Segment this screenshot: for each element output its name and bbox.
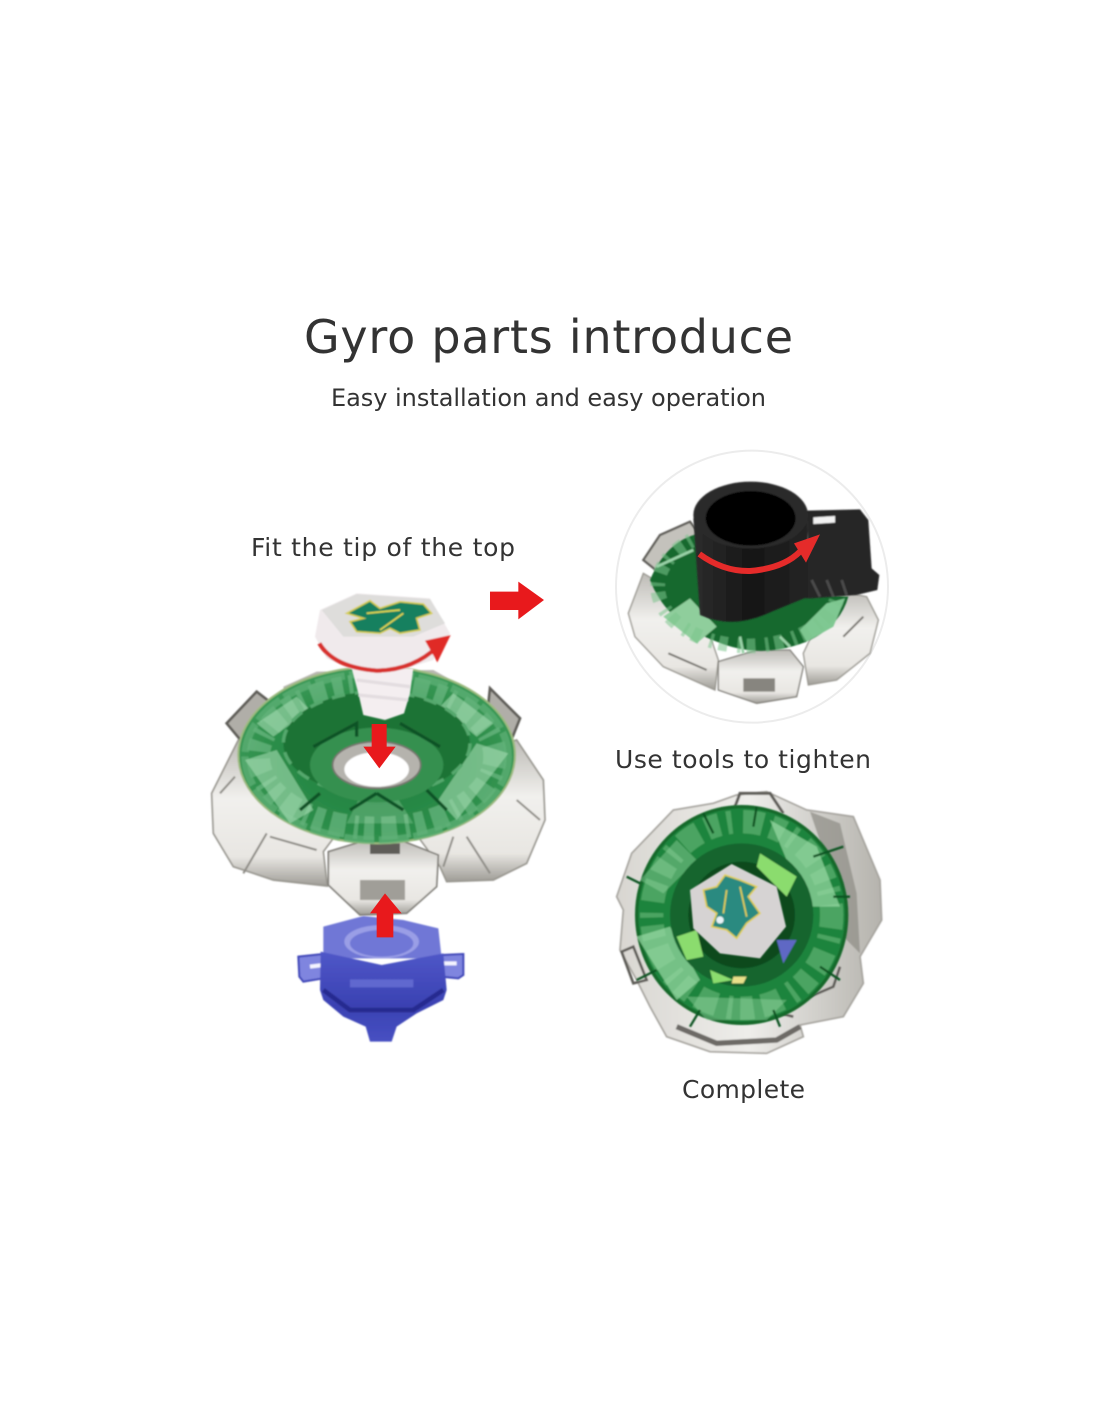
arrow: up into disk — [370, 893, 402, 937]
title: Gyro parts introduce — [304, 310, 793, 364]
star — [716, 916, 724, 924]
rotation arrow — [319, 635, 451, 671]
green ring — [650, 527, 848, 653]
black tool — [693, 482, 879, 622]
arrow: down into disk — [363, 724, 396, 768]
circle frame — [616, 451, 888, 723]
step label: tighten: Use tools to tighten — [615, 745, 871, 774]
tip: white bit with logo — [315, 593, 451, 720]
exploded assembly illustration — [212, 582, 545, 1042]
metal wheel — [617, 792, 882, 1053]
metal wheel — [628, 522, 878, 703]
subtitle: Easy installation and easy operation — [331, 384, 766, 412]
disk: metal wheel and green ring — [212, 667, 545, 915]
completed top — [617, 792, 882, 1053]
step label: complete: Complete — [682, 1075, 805, 1104]
tightening view in circle — [616, 451, 888, 723]
rotation arrow — [699, 534, 820, 571]
green ring — [627, 807, 850, 1027]
step label: fit the tip: Fit the tip of the top — [251, 533, 515, 562]
arrow: next step — [490, 582, 544, 619]
ring ribs — [258, 685, 495, 828]
center hexagon with lion logo — [690, 864, 786, 958]
blue driver tip — [298, 916, 463, 1042]
